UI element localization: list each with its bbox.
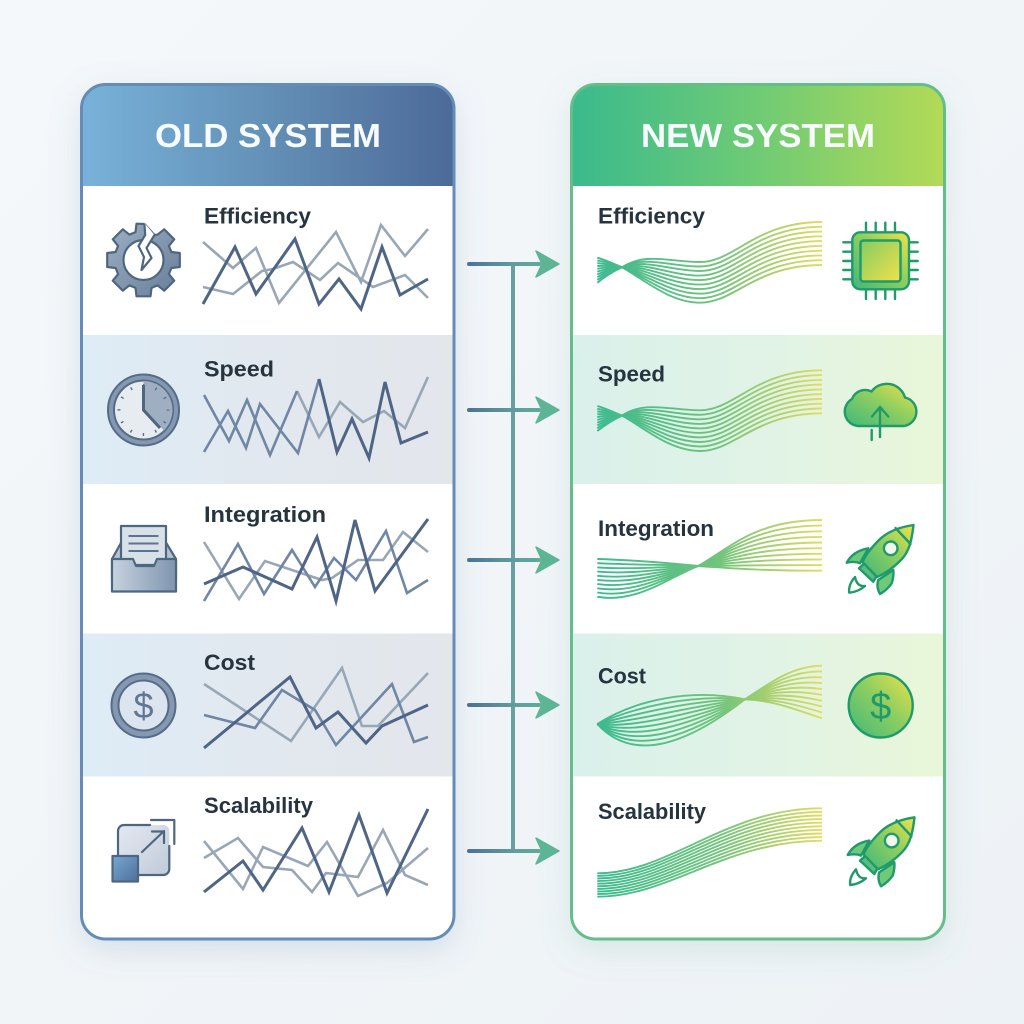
row: old efficiency	[107, 204, 428, 309]
label: speed: Speed	[598, 362, 665, 386]
label: efficiency: Efficiency	[598, 204, 706, 228]
arrow: speed	[467, 397, 559, 423]
label: efficiency: Efficiency	[204, 204, 312, 228]
arrow: cost	[467, 692, 559, 718]
heading: new system: NEW SYSTEM	[641, 117, 875, 154]
chart: cost smooth ribbon	[597, 666, 822, 745]
label: scalability: Scalability	[204, 793, 314, 818]
icon: green dollar coin: $	[870, 686, 891, 728]
icon: broken gear	[107, 223, 180, 296]
row: new cost	[597, 664, 913, 745]
row: old scalability	[112, 793, 428, 896]
chart: integration smooth ribbon	[597, 520, 822, 598]
arrows: old to new connector	[467, 251, 559, 864]
row: new efficiency	[597, 204, 918, 303]
label: integration: Integration	[204, 502, 326, 527]
chart: cost jagged lines	[204, 668, 428, 748]
icon: rocket	[848, 817, 914, 886]
label: cost: Cost	[598, 664, 647, 688]
row: old integration	[112, 502, 428, 601]
chart: efficiency smooth ribbon	[597, 222, 822, 303]
icon: microchip	[843, 223, 918, 299]
arrow: integration	[467, 547, 559, 573]
chart: scalability smooth ribbon	[597, 808, 822, 897]
icon: clock	[108, 374, 179, 446]
arrow: efficiency	[467, 251, 559, 277]
panel: old system	[81, 84, 454, 939]
label: scalability: Scalability	[598, 799, 707, 824]
icon: cloud upload	[845, 384, 916, 440]
icon: inbox tray	[112, 526, 176, 592]
icon: scale up	[112, 820, 174, 882]
icon: dollar coin: $	[133, 685, 154, 726]
chart: scalability jagged lines	[204, 809, 428, 896]
row: old cost	[112, 650, 428, 748]
panel: new system	[571, 84, 945, 939]
label: speed: Speed	[204, 356, 274, 382]
chart: speed jagged lines	[204, 377, 428, 458]
icon: rocket	[847, 525, 914, 594]
icon: green dollar coin	[849, 674, 913, 738]
icon: dollar coin	[112, 674, 176, 738]
chart: efficiency jagged lines	[203, 225, 428, 309]
row: old speed	[108, 356, 428, 458]
arrow: scalability	[467, 838, 559, 864]
label: integration: Integration	[598, 516, 714, 541]
label: cost: Cost	[204, 650, 256, 675]
heading: old system: OLD SYSTEM	[155, 117, 381, 154]
row: new integration	[597, 516, 914, 598]
chart: integration jagged lines	[204, 519, 428, 601]
row: new speed	[597, 362, 916, 451]
chart: speed smooth ribbon	[597, 370, 822, 451]
row: new scalability	[597, 799, 914, 897]
